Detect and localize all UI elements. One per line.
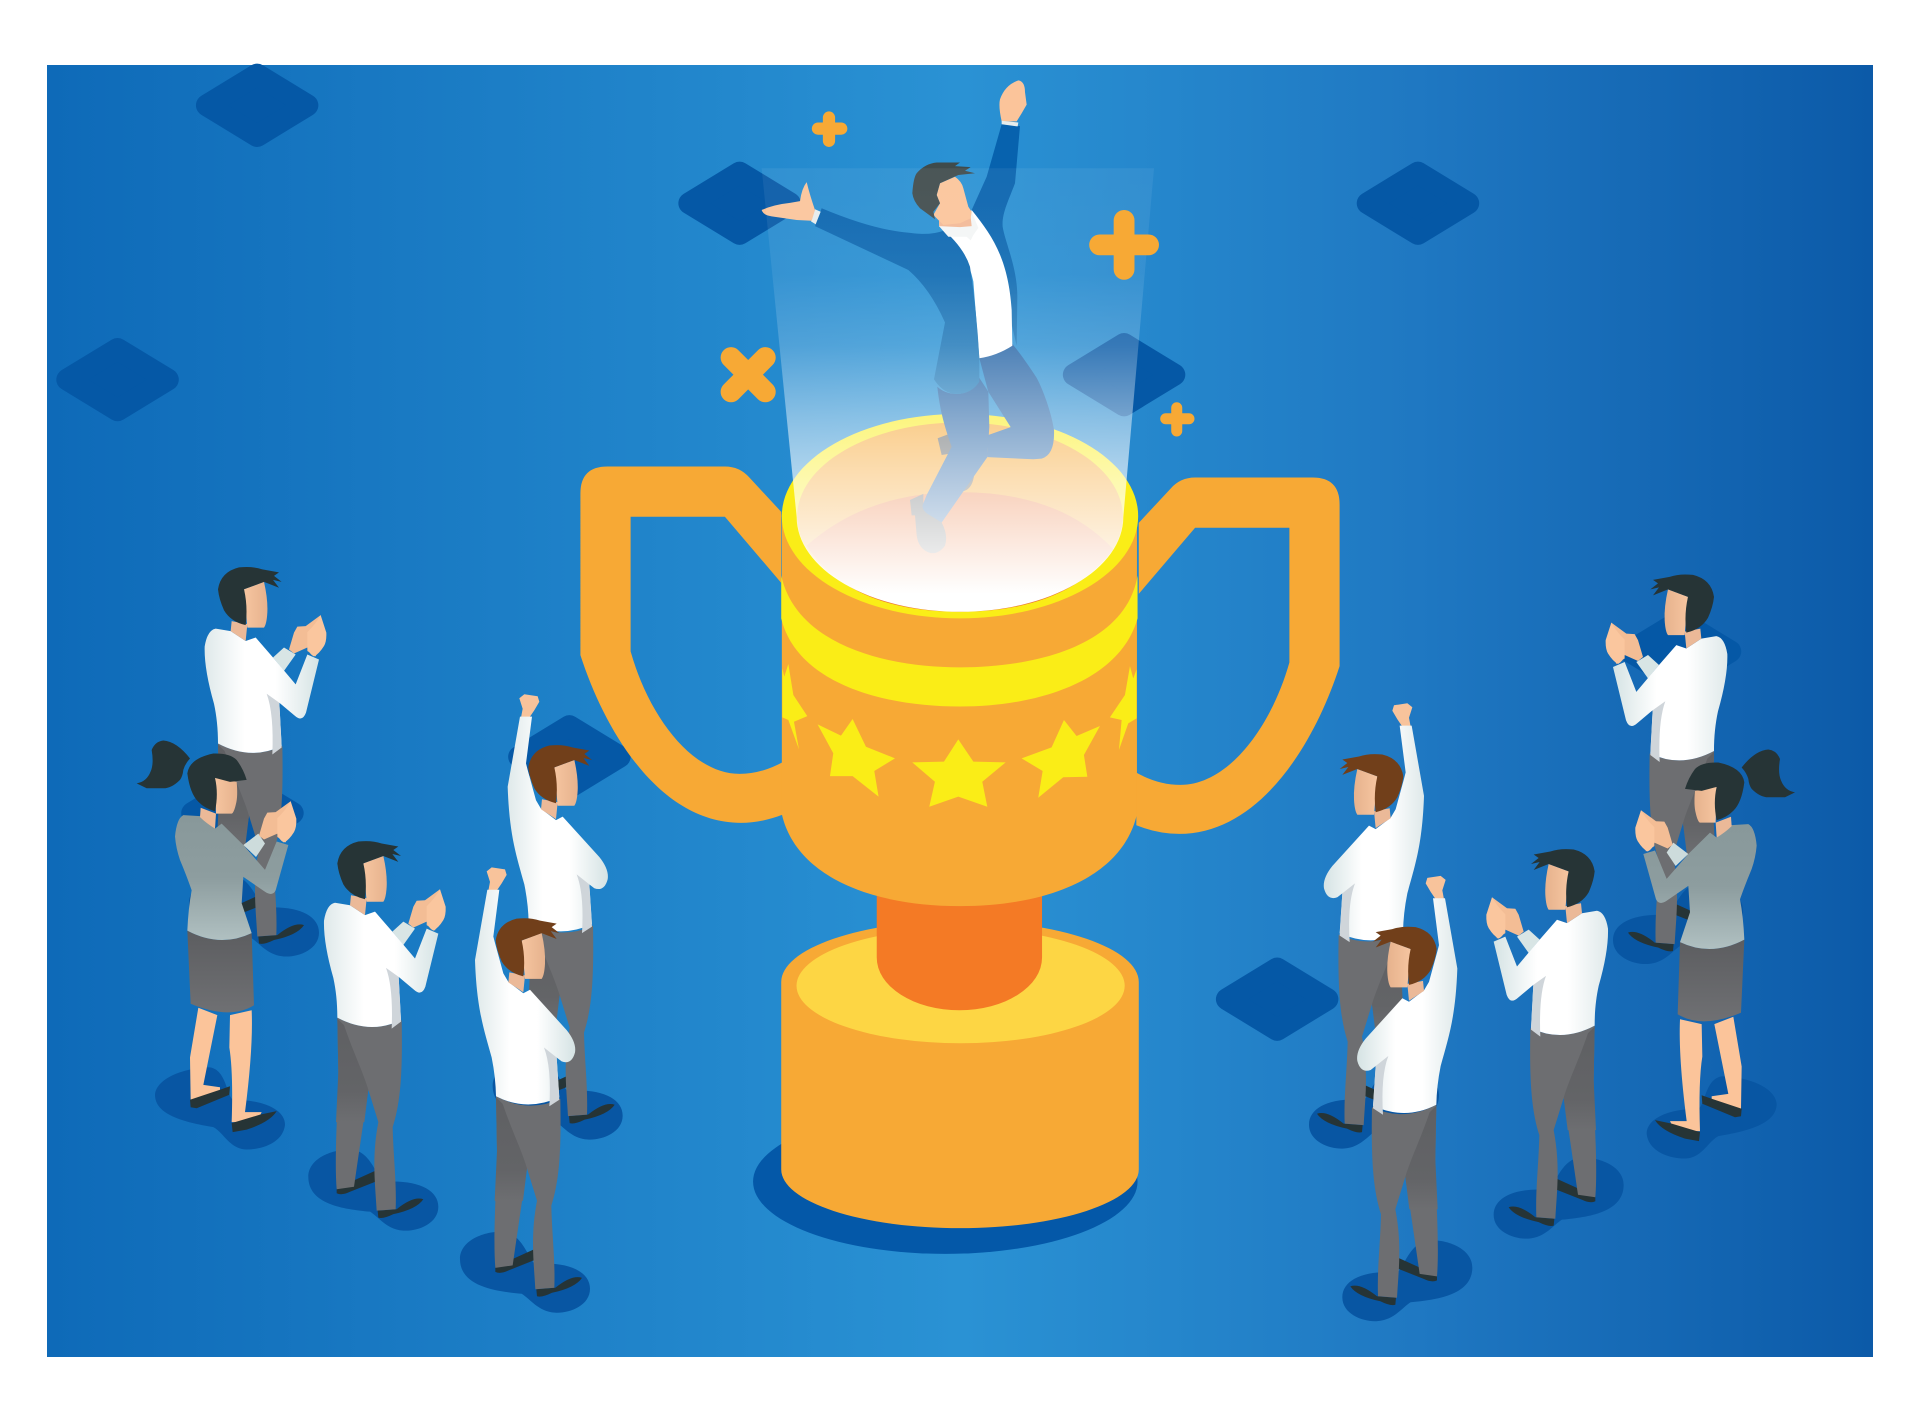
- group of people on the right: [1309, 574, 1795, 1321]
- trophy base top: [797, 928, 1125, 1043]
- cheering man, front: [1342, 876, 1472, 1321]
- hero figure and beam: [762, 80, 1154, 612]
- stars on the cup: [782, 664, 1137, 807]
- clapping man, front: [1486, 849, 1624, 1239]
- clapping woman: [137, 741, 296, 1149]
- cup interior lower disc: [807, 492, 1113, 612]
- large plus: [1100, 220, 1149, 269]
- clapping man, back: [1606, 574, 1743, 964]
- light beam: [762, 168, 1154, 612]
- cup interior: [797, 422, 1123, 611]
- cheering man, back: [493, 694, 623, 1140]
- cheering man, back: [1309, 703, 1439, 1149]
- cheering man, front: [460, 867, 590, 1313]
- small plus lower: [1166, 408, 1189, 431]
- yellow band: [781, 576, 1138, 707]
- right handle: [1136, 478, 1340, 834]
- trophy cup body: [782, 514, 1137, 906]
- trophy base shadow: [753, 1109, 1138, 1254]
- cross: [731, 358, 765, 392]
- decorative floor diamonds: [67, 75, 1730, 1030]
- group of people on the left: [137, 567, 623, 1313]
- clapping woman: [1635, 750, 1795, 1158]
- clapping man, back: [189, 567, 326, 957]
- jumping man: [762, 80, 1054, 553]
- sparkles: [731, 118, 1189, 431]
- clapping man, front: [308, 841, 446, 1231]
- trophy base: [781, 921, 1139, 1228]
- cup rim: [782, 414, 1138, 618]
- left handle: [580, 467, 784, 823]
- small plus top: [818, 118, 841, 141]
- trophy stem: [877, 894, 1042, 1010]
- trophy: [580, 414, 1340, 1254]
